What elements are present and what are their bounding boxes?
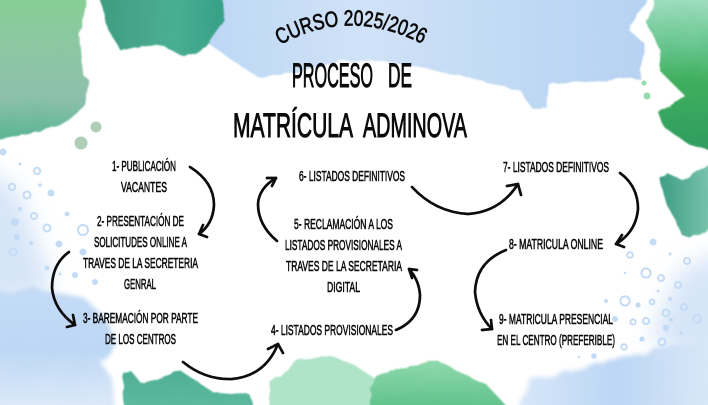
title line 2: MATRÍCULA — [233, 107, 353, 145]
step 2: TRAVES DE LA SECRETERIA — [83, 256, 198, 272]
title line 2: ADMINOVA — [363, 107, 467, 145]
step 5: TRAVES DE LA SECRETARIA — [286, 259, 402, 275]
arrow: step 4 to 5 — [396, 269, 420, 330]
step 3: 3- BAREMACIÓN POR PARTE — [83, 310, 198, 327]
title — [233, 57, 467, 145]
dots: grey-green specks — [74, 122, 102, 150]
step 8: 8- MATRICULA ONLINE — [509, 237, 603, 253]
arrow: step 6 to 7 — [412, 184, 521, 214]
step 5 — [285, 216, 402, 296]
step 1 — [112, 158, 176, 196]
step 1: VACANTES — [121, 180, 167, 196]
blob: left blue haze — [0, 160, 55, 310]
step 4: 4- LISTADOS PROVISIONALES — [271, 323, 393, 339]
blob: top-left green wash — [0, 0, 89, 141]
blob: bottom-right blue wash — [517, 340, 708, 405]
step 9 — [497, 312, 615, 349]
blob: top teal wash — [98, 0, 224, 57]
blob: bottom green wash — [370, 360, 511, 405]
dots: right blue rings — [620, 252, 701, 350]
blob: bottom-right blue haze — [650, 250, 708, 380]
step 2: SOLICITUDES ONLINE A — [94, 235, 187, 251]
arrow: step 8 to 9 — [475, 250, 506, 330]
course label curved along an arc: CURSO 2025/2026 — [276, 10, 428, 43]
arrow: step 2 to 3 — [52, 252, 75, 327]
dots: left blue filled spots — [0, 148, 98, 285]
blob: right teal wash — [659, 165, 708, 239]
step 9: EN EL CENTRO (PREFERIBLE) — [497, 333, 615, 349]
blob: bottom-left blue wash — [0, 288, 117, 405]
arrow: step 3 to 4 — [183, 344, 283, 379]
step 3: DE LOS CENTROS — [105, 332, 176, 348]
blob: bottom teal wash — [122, 370, 255, 405]
step 6: 6- LISTADOS DEFINITIVOS — [299, 169, 405, 185]
step 5: LISTADOS PROVISIONALES A — [285, 238, 402, 254]
step 1: 1- PUBLICACIÓN — [112, 158, 176, 175]
blob: bottom light green wash — [270, 355, 385, 405]
dots: right blue filled spots — [578, 238, 683, 359]
blob: right green wash — [647, 0, 708, 152]
dots: left blue rings — [9, 168, 88, 256]
arrow: step 1 to 2 — [190, 167, 214, 237]
step 2: GENRAL — [124, 277, 156, 293]
title line 1: PROCESO — [292, 57, 373, 95]
step 9: 9- MATRICULA PRESENCIAL — [499, 312, 613, 328]
arrow: step 7 to 8 — [616, 173, 638, 247]
arrow: step 5 to 6 — [258, 178, 277, 241]
dots: right green specks — [642, 80, 650, 100]
step 7: 7- LISTADOS DEFINITIVOS — [503, 160, 609, 176]
step 3 — [83, 310, 198, 348]
title line 1: DE — [388, 57, 412, 95]
step 5: DIGITAL — [327, 280, 360, 296]
step 2 — [83, 213, 198, 293]
step 5: 5- RECLAMACIÓN A LOS — [294, 216, 393, 233]
blob: top blue wash — [208, 0, 650, 110]
step 2: 2- PRESENTACIÓN DE — [97, 213, 184, 230]
